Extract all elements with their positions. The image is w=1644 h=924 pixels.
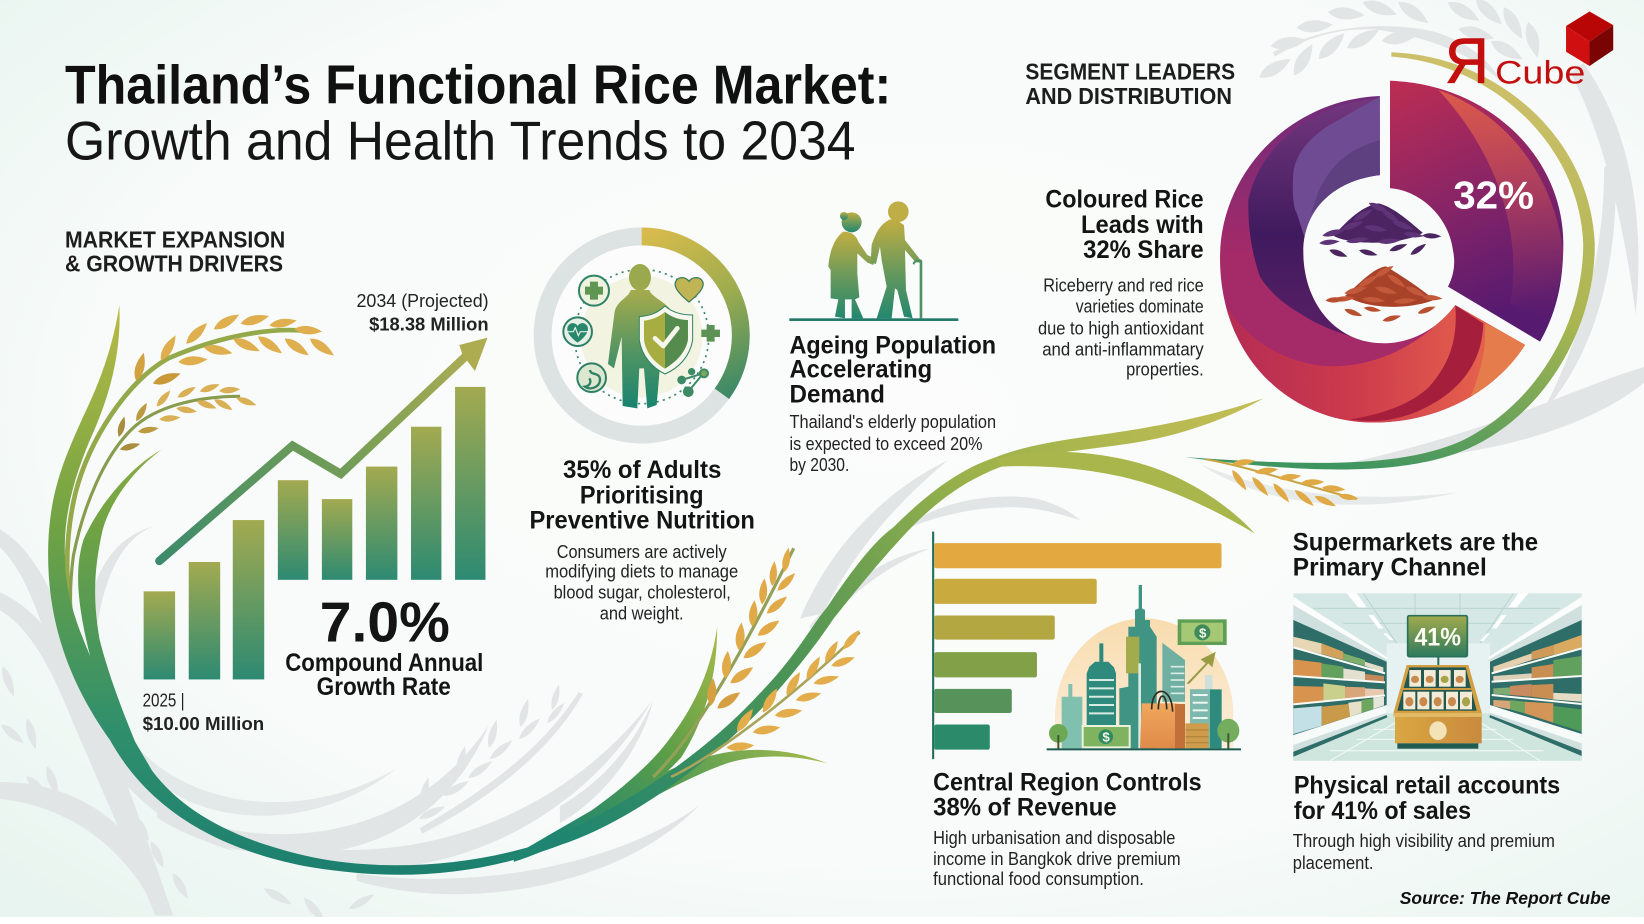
icon: plus circle xyxy=(579,276,609,306)
text block: ageing population: is expected to exceed 20% xyxy=(790,433,983,454)
bottom margin strip xyxy=(0,917,1644,924)
icon: heartbeat circle xyxy=(563,317,592,346)
text block: central region: Central Region Controls xyxy=(933,770,1202,797)
left shelves xyxy=(1293,597,1387,757)
text block: preventive nutrition: blood sugar, cholesterol, xyxy=(554,582,731,603)
icon: wheat ear lower two xyxy=(671,628,862,777)
text block: central region: income in Bangkok drive premium xyxy=(933,848,1181,869)
icon: molecule xyxy=(678,369,708,396)
icon: stomach circle xyxy=(577,363,606,392)
label: 2025 value xyxy=(143,690,264,734)
icon: wheat ear upper left xyxy=(132,311,336,388)
text block: preventive nutrition: Consumers are actively xyxy=(557,541,727,562)
text block: physical retail xyxy=(1293,773,1560,873)
section heading: market expansion: & GROWTH DRIVERS xyxy=(65,251,283,277)
text block: physical retail: placement. xyxy=(1293,852,1374,873)
text block: coloured rice xyxy=(1038,187,1204,379)
label: 2034 projected xyxy=(356,290,489,334)
text block: ageing population xyxy=(790,332,996,475)
illustration: supermarket aisle xyxy=(1293,593,1582,761)
green swoosh: left rice stems xyxy=(48,305,560,875)
text block: coloured rice: Coloured Rice xyxy=(1045,187,1204,214)
label: 2034 projected: $18.38 Million xyxy=(369,313,489,334)
sign: 41%: 41% xyxy=(1414,625,1461,652)
title xyxy=(65,54,891,171)
text block: central region: High urbanisation and disposable xyxy=(933,827,1175,848)
text block: ageing population: by 2030. xyxy=(790,454,849,475)
section heading: market expansion xyxy=(65,226,285,277)
text block: central region xyxy=(933,770,1202,889)
text block: coloured rice: varieties dominate xyxy=(1076,295,1204,316)
icon: heart xyxy=(675,278,703,302)
section heading: segment leaders: AND DISTRIBUTION xyxy=(1025,83,1232,109)
label: 2025 value: 2025 | xyxy=(143,690,185,711)
text block: ageing population: Ageing Population xyxy=(790,332,996,359)
label: 2034 projected: 2034 (Projected) xyxy=(356,290,489,311)
illustration: city skyline: $ xyxy=(1102,730,1110,745)
stat: CAGR xyxy=(285,591,483,701)
icon: purple rice pile xyxy=(1319,200,1441,259)
donut gauge: 35 percent of adults xyxy=(543,236,741,435)
icon: person with shield xyxy=(563,264,720,408)
logo: RCube: Я xyxy=(1445,25,1489,97)
text block: preventive nutrition: and weight. xyxy=(600,603,684,624)
icon: small plus xyxy=(701,325,720,342)
text block: preventive nutrition: modifying diets to manage xyxy=(545,561,738,582)
section heading: market expansion: MARKET EXPANSION xyxy=(65,226,285,252)
section heading: segment leaders: SEGMENT LEADERS xyxy=(1025,59,1235,85)
green swoosh: stem around the donut xyxy=(1185,52,1595,469)
text block: physical retail: Physical retail accounts xyxy=(1294,773,1560,800)
text block: physical retail: for 41% of sales xyxy=(1294,798,1471,825)
text block: central region: functional food consumption. xyxy=(933,868,1144,889)
text block: coloured rice: 32% Share xyxy=(1083,237,1204,264)
icon: wheat ear lower one xyxy=(653,547,798,777)
slice: remaining share xyxy=(1220,96,1525,422)
icon: wheat ear second xyxy=(116,381,257,452)
text block: preventive nutrition: Prioritising xyxy=(580,482,704,509)
icon: shield with check xyxy=(639,306,693,374)
product stand xyxy=(1393,665,1482,749)
bar chart: market growth xyxy=(144,387,485,679)
title: Thailand’s Functional Rice Market: xyxy=(65,54,891,115)
icon: elderly couple xyxy=(789,201,958,321)
donut chart: coloured rice share xyxy=(1206,81,1563,440)
section heading: segment leaders xyxy=(1025,59,1235,109)
illustration: city skyline: $ xyxy=(1199,625,1207,640)
text block: coloured rice: Riceberry and red rice xyxy=(1043,274,1204,295)
text block: ageing population: Accelerating xyxy=(790,356,932,383)
icon: red rice pile xyxy=(1325,264,1443,323)
value: 32%: 32% xyxy=(1453,175,1534,218)
text block: coloured rice: due to high antioxidant xyxy=(1038,317,1204,338)
heading: supermarkets: Primary Channel xyxy=(1293,555,1487,582)
text block: physical retail: Through high visibility and premium xyxy=(1293,830,1555,851)
title: Growth and Health Trends to 2034 xyxy=(65,110,856,171)
heading: supermarkets: Supermarkets are the xyxy=(1293,529,1538,556)
text block: coloured rice: properties. xyxy=(1126,358,1204,379)
slice: 32 percent xyxy=(1390,81,1563,342)
text block: central region: 38% of Revenue xyxy=(933,795,1117,822)
text block: preventive nutrition xyxy=(529,457,755,624)
horizontal bar chart: regional revenue xyxy=(932,532,1222,759)
heading: supermarkets xyxy=(1293,529,1538,582)
label: 2025 value: $10.00 Million xyxy=(143,713,264,734)
right shelves xyxy=(1488,597,1582,756)
text block: coloured rice: and anti-inflammatary xyxy=(1042,338,1204,359)
stat: CAGR: Compound Annual xyxy=(285,650,483,677)
source line: Source: The Report Cube xyxy=(1400,888,1611,908)
illustration: city skyline xyxy=(1047,585,1241,750)
text block: ageing population: Demand xyxy=(790,382,885,409)
arrow: growth trend xyxy=(159,338,488,561)
green swoosh: rising leaves right of the curve xyxy=(493,398,1263,862)
stat: CAGR: 7.0% xyxy=(320,591,450,654)
stat: CAGR: Growth Rate xyxy=(317,674,451,701)
icon: wheat ear under donut xyxy=(1206,458,1359,509)
sign: 41% xyxy=(1408,616,1467,666)
text block: coloured rice: Leads with xyxy=(1081,212,1204,239)
text block: preventive nutrition: 35% of Adults xyxy=(563,457,721,484)
logo: RCube: Cube xyxy=(1495,54,1585,90)
text block: preventive nutrition: Preventive Nutrition xyxy=(529,507,755,534)
logo: RCube xyxy=(1445,12,1613,97)
text block: ageing population: Thailand's elderly population xyxy=(790,411,996,432)
